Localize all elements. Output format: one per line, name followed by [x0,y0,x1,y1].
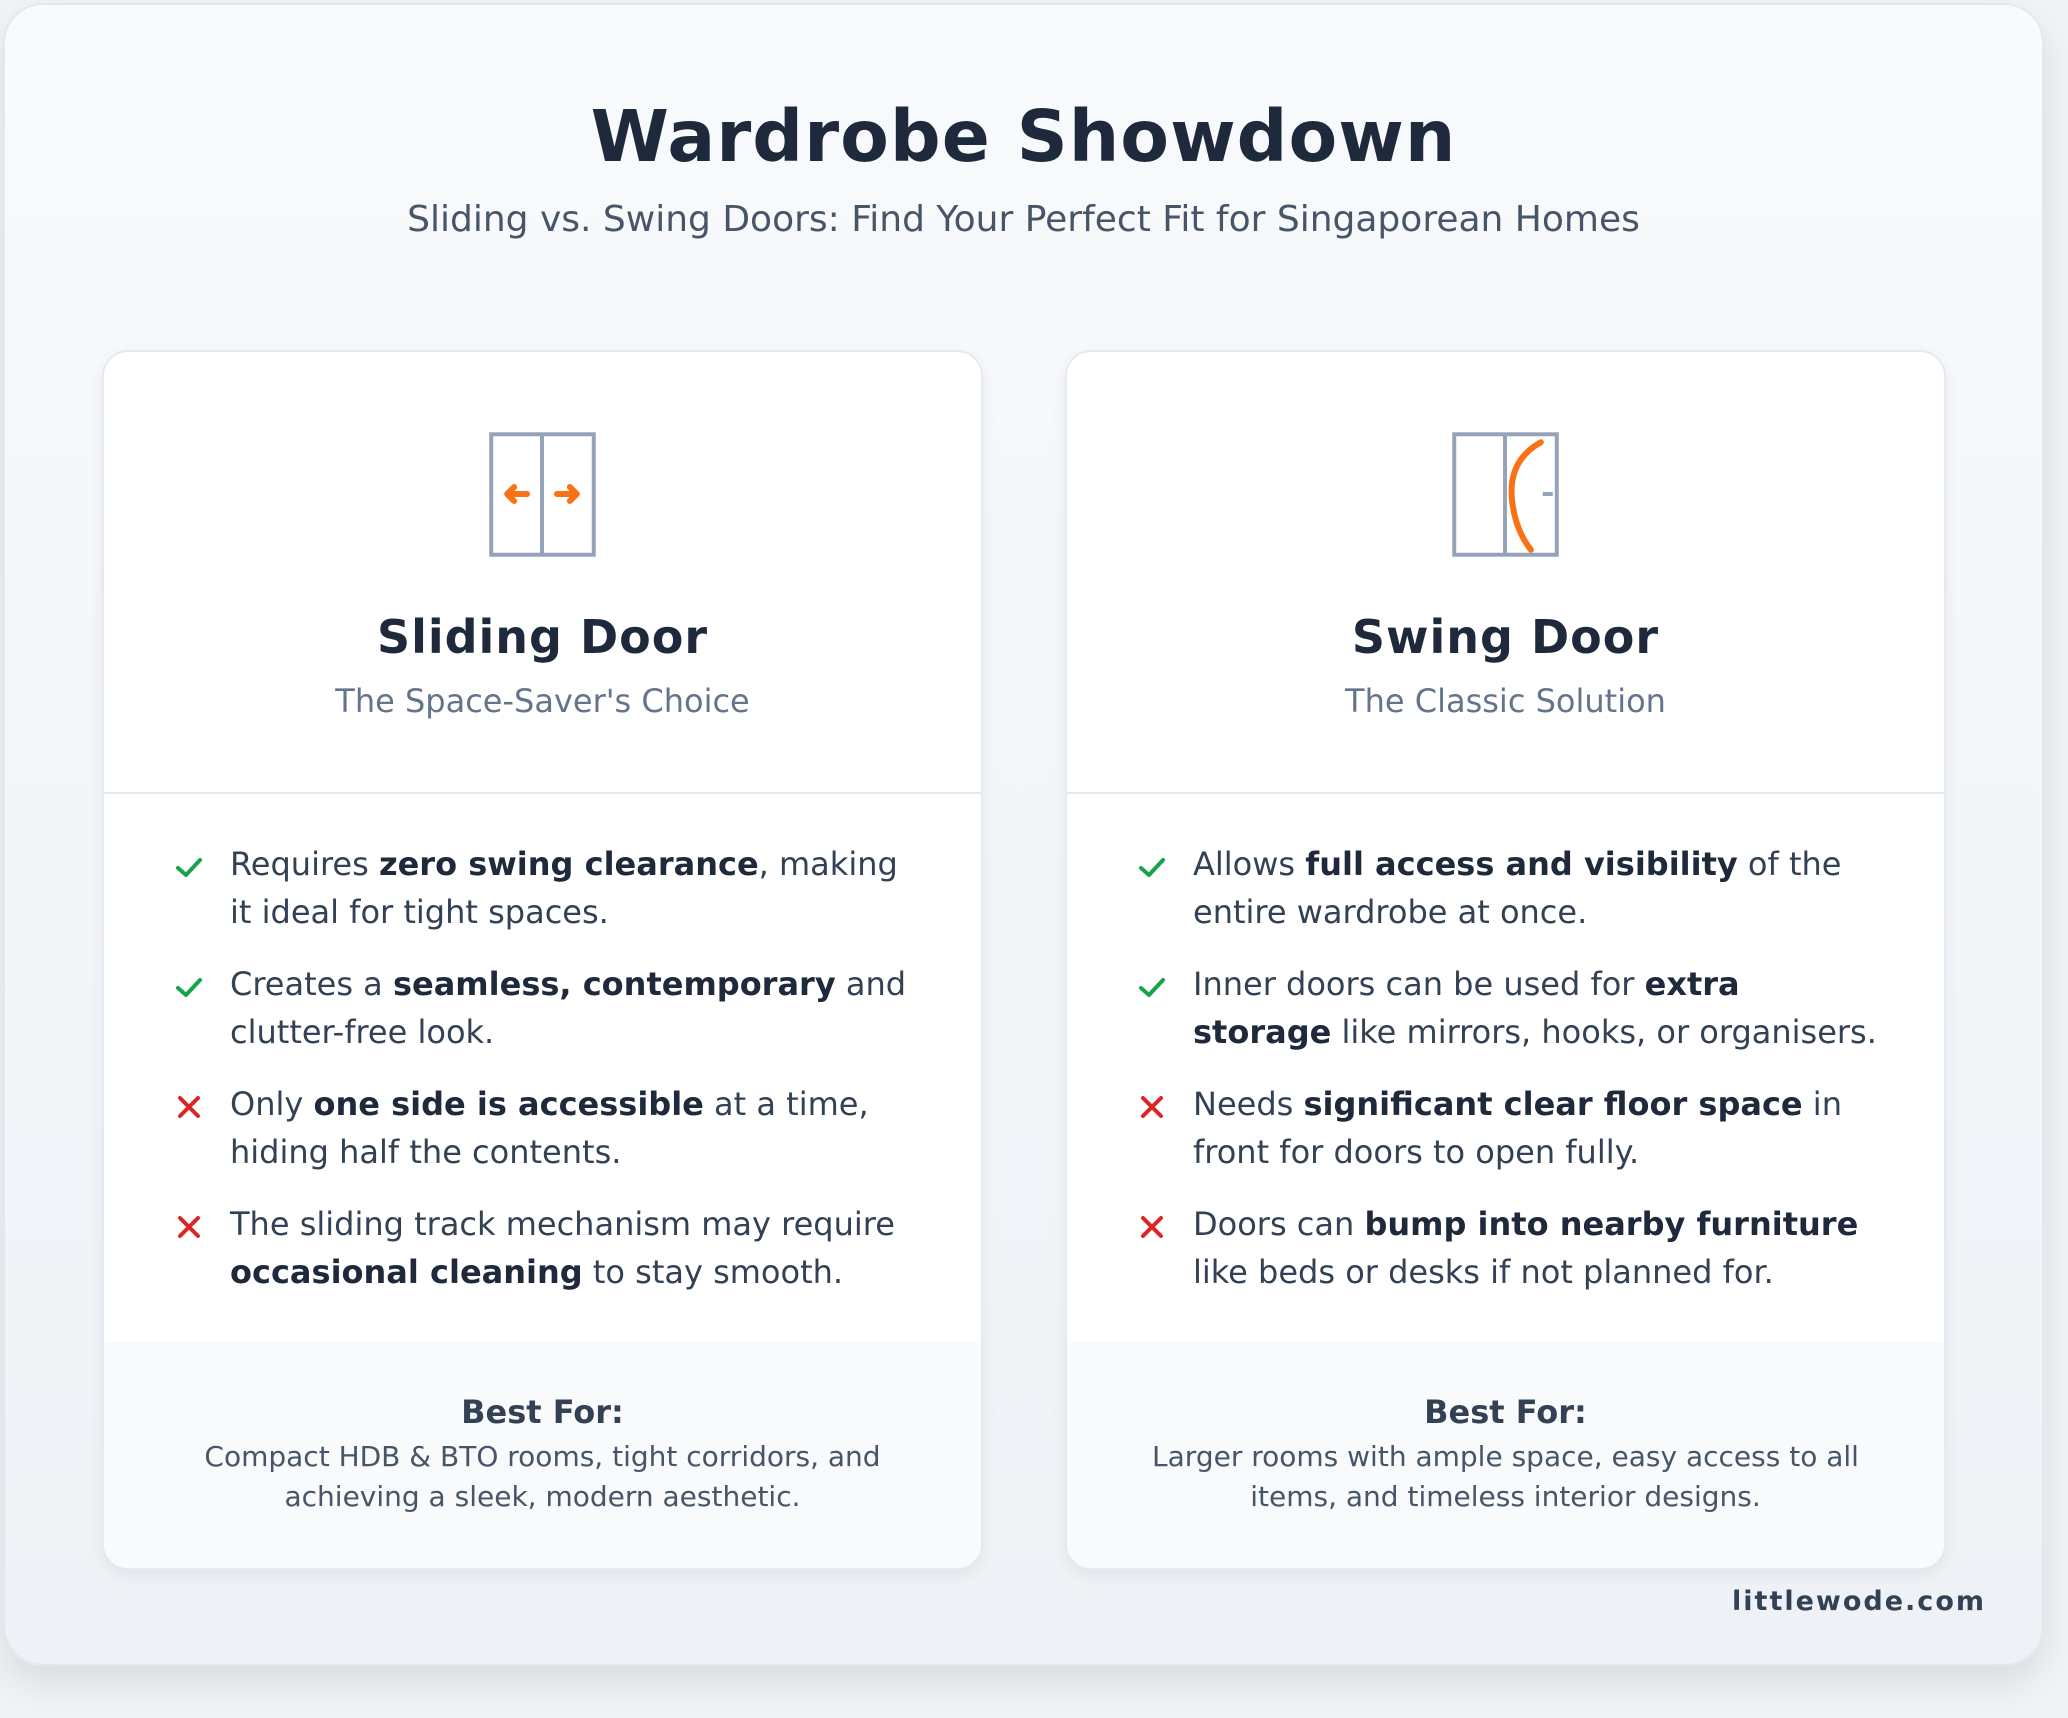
title: Wardrobe Showdown [591,95,1456,178]
pros and cons list: Needs significant clear floor space in front for doors to open fully. [1193,1085,1842,1171]
best for: Compact HDB & BTO rooms, tight corridors, and [204,1440,881,1473]
tagline: The Space-Saver's Choice [335,682,750,720]
best for: achieving a sleek, modern aesthetic. [284,1480,801,1513]
pros and cons list: Only one side is accessible at a time, hiding half the contents. [230,1085,869,1171]
pros and cons list: Requires zero swing clearance, making it ideal for tight spaces. [230,845,898,931]
pros and cons list [176,845,906,1291]
panel: swing door [1065,350,1946,1570]
heading: Sliding Door [377,610,708,664]
best for [1067,1343,1944,1568]
icon: swing door [1452,432,1559,557]
best for [104,1343,981,1568]
best for: Best For: [1424,1393,1587,1431]
footer: site: littlewode.com [1732,1586,1986,1617]
pros and cons list: The sliding track mechanism may require occasional cleaning to stay smooth. [230,1205,895,1291]
best for: Larger rooms with ample space, easy access to all [1152,1440,1859,1473]
tagline: The Classic Solution [1345,682,1666,720]
best for: items, and timeless interior designs. [1250,1480,1761,1513]
pros and cons list: Doors can bump into nearby furniture like beds or desks if not planned for. [1193,1205,1858,1291]
pros and cons list [1138,845,1877,1291]
pros and cons list: Allows full access and visibility of the entire wardrobe at once. [1193,845,1841,931]
subtitle: Sliding vs. Swing Doors: Find Your Perfect Fit for Singaporean Homes [407,199,1640,240]
pros and cons list: Inner doors can be used for extra storage like mirrors, hooks, or organisers. [1193,965,1877,1051]
icon: sliding door [489,432,596,557]
best for: Best For: [461,1393,624,1431]
panel: sliding door [102,350,983,1570]
pros and cons list: Creates a seamless, contemporary and clutter-free look. [230,965,906,1051]
heading: Swing Door [1352,610,1659,664]
